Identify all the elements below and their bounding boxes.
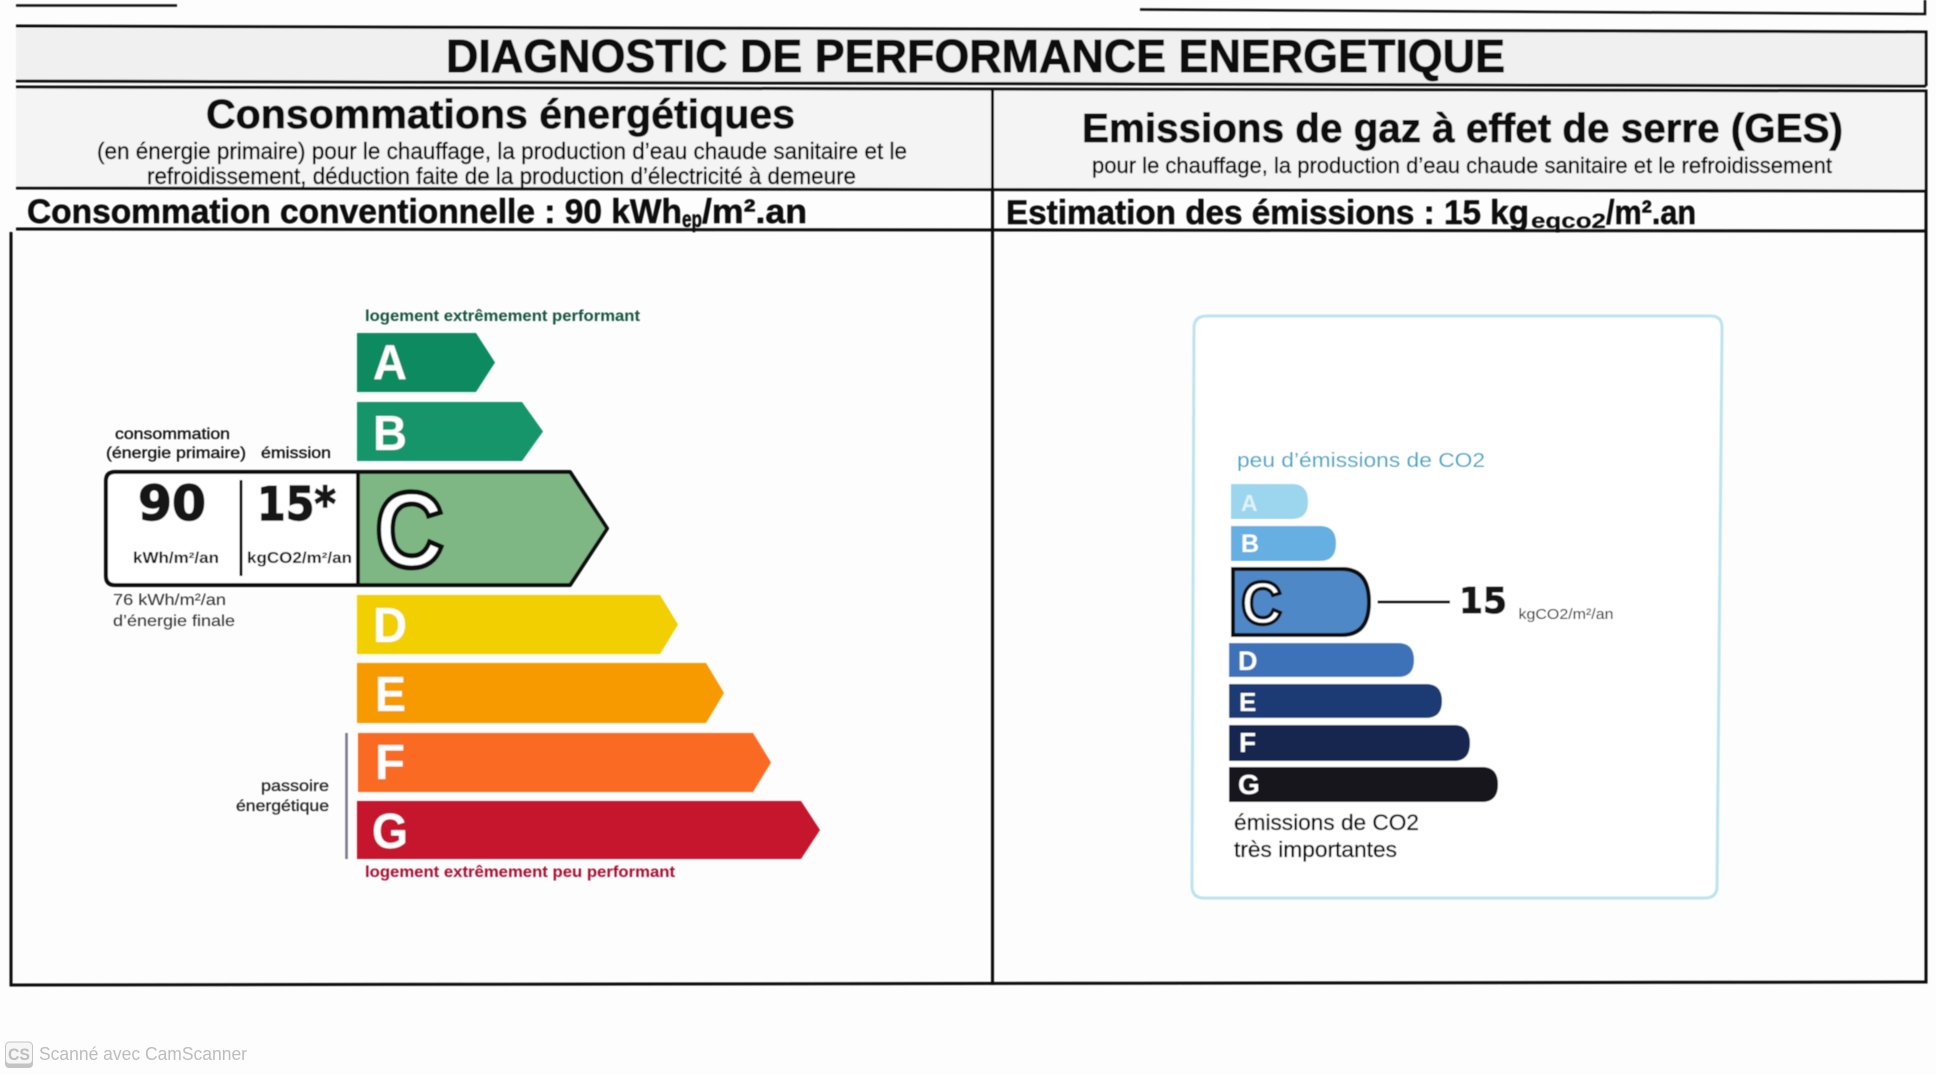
caption: low emissions: peu d’émissions de CO2: [1237, 450, 1485, 472]
bar: class F: F: [375, 736, 405, 790]
icon: CS badge: CS: [8, 1045, 30, 1064]
chart: energy label A to G: [106, 308, 820, 881]
value: estimated emissions: eqco2: [1531, 210, 1606, 233]
labels: consumption and emission columns: émission: [261, 445, 331, 462]
label: passoire énergétique: passoire: [261, 778, 329, 795]
label: passoire énergétique: [236, 778, 329, 815]
value: 90: 90: [138, 476, 206, 532]
value: estimated emissions: Estimation des émissions : 15 kg: [1006, 194, 1529, 232]
description: consumption scope: (en énergie primaire) pour le chauffage, la production d’eau chaude sanitaire et le: [97, 138, 907, 164]
unit: kgCO2: kgCO2/m²/an: [1518, 606, 1614, 623]
bar: class G: G: [372, 805, 408, 859]
bar: class B: B: [373, 407, 407, 461]
caption: bottom of energy scale: logement extrêmement peu performant: [365, 864, 676, 881]
letter: C: C: [375, 469, 444, 590]
bar: class E: E: [1239, 687, 1256, 717]
note: final energy: 76 kWh/m²/an: [113, 592, 226, 609]
caption: high emissions: émissions de CO2: [1234, 810, 1419, 835]
bar: class E: [1229, 684, 1442, 718]
connector line: [1378, 600, 1450, 604]
bar: class A: A: [373, 336, 407, 390]
bar: class A: [1231, 484, 1308, 519]
description: emissions scope: pour le chauffage, la production d’eau chaude sanitaire et le refroidissement: [1092, 153, 1833, 178]
text: Scanné avec CamScanner: Scanné avec CamScanner: [39, 1044, 247, 1064]
labels: consumption and emission columns: consommation: [115, 426, 230, 443]
value: 15: 15: [1459, 581, 1507, 622]
chart: climate label A to G: [1192, 316, 1722, 898]
title: DIAGNOSTIC DE PERFORMANCE ENERGETIQUE: [446, 30, 1505, 82]
description: consumption scope: refroidissement, déduction faite de la production d’électricité à demeure: [147, 163, 856, 189]
bar: class B: [357, 402, 543, 461]
frame: [1192, 316, 1722, 898]
bar: class D: [357, 595, 678, 654]
panel heading: energy consumption: [27, 91, 907, 232]
bar: class D: D: [1238, 646, 1258, 676]
bar: class B: B: [1241, 530, 1259, 558]
bar: class G: G: [1238, 769, 1260, 800]
unit: kgCO2: kgCO2/m²/an: [247, 550, 352, 567]
caption: high emissions: [1234, 810, 1419, 862]
unit: kWh: kWh/m²/an: [133, 550, 219, 567]
bar: class E: [357, 663, 724, 723]
bar: class F: [358, 733, 771, 792]
bar: class A: A: [1241, 490, 1258, 516]
watermark: CamScanner: [5, 1042, 247, 1068]
value: conventional consumption: ep: [682, 206, 702, 232]
icon: CS badge: [5, 1042, 33, 1068]
bar: class D: D: [373, 599, 407, 653]
bar: class A: [357, 333, 495, 392]
highlighted class C with values: [106, 469, 607, 590]
bar: class G: [357, 801, 820, 859]
bar: class F: F: [1239, 727, 1256, 758]
value: 15: 15*: [257, 477, 336, 531]
value: estimated emissions: /m².an: [1606, 194, 1696, 232]
bar: class F: [1229, 725, 1470, 761]
highlighted class C: C: [1241, 570, 1282, 637]
bar: class E: E: [375, 668, 406, 722]
bracket: energy sieve: [345, 733, 348, 859]
value: conventional consumption: Consommation conventionnelle : 90 kWh: [27, 193, 682, 231]
caption: high emissions: très importantes: [1234, 837, 1397, 862]
note: final energy: [113, 592, 235, 630]
bar: class D: [1229, 643, 1414, 677]
labels: consumption and emission columns: [106, 426, 331, 462]
panel heading: greenhouse gas emissions: [1006, 105, 1843, 233]
bar: class B: [1231, 526, 1336, 561]
labels: consumption and emission columns: (énergie primaire): [106, 445, 246, 462]
heading: Consommations énergétiques: Consommations énergétiques: [206, 91, 795, 137]
label: passoire énergétique: énergétique: [236, 798, 329, 815]
caption: top of energy scale: logement extrêmement performant: [365, 308, 641, 325]
description: consumption scope: [97, 138, 907, 189]
heading: Emissions de gaz à effet de serre: Emissions de gaz à effet de serre (GES): [1082, 105, 1843, 151]
value: conventional consumption: /m².an: [702, 193, 807, 231]
note: final energy: d’énergie finale: [113, 613, 235, 630]
bar: class G: [1229, 767, 1498, 802]
highlighted class C: [1233, 569, 1369, 637]
